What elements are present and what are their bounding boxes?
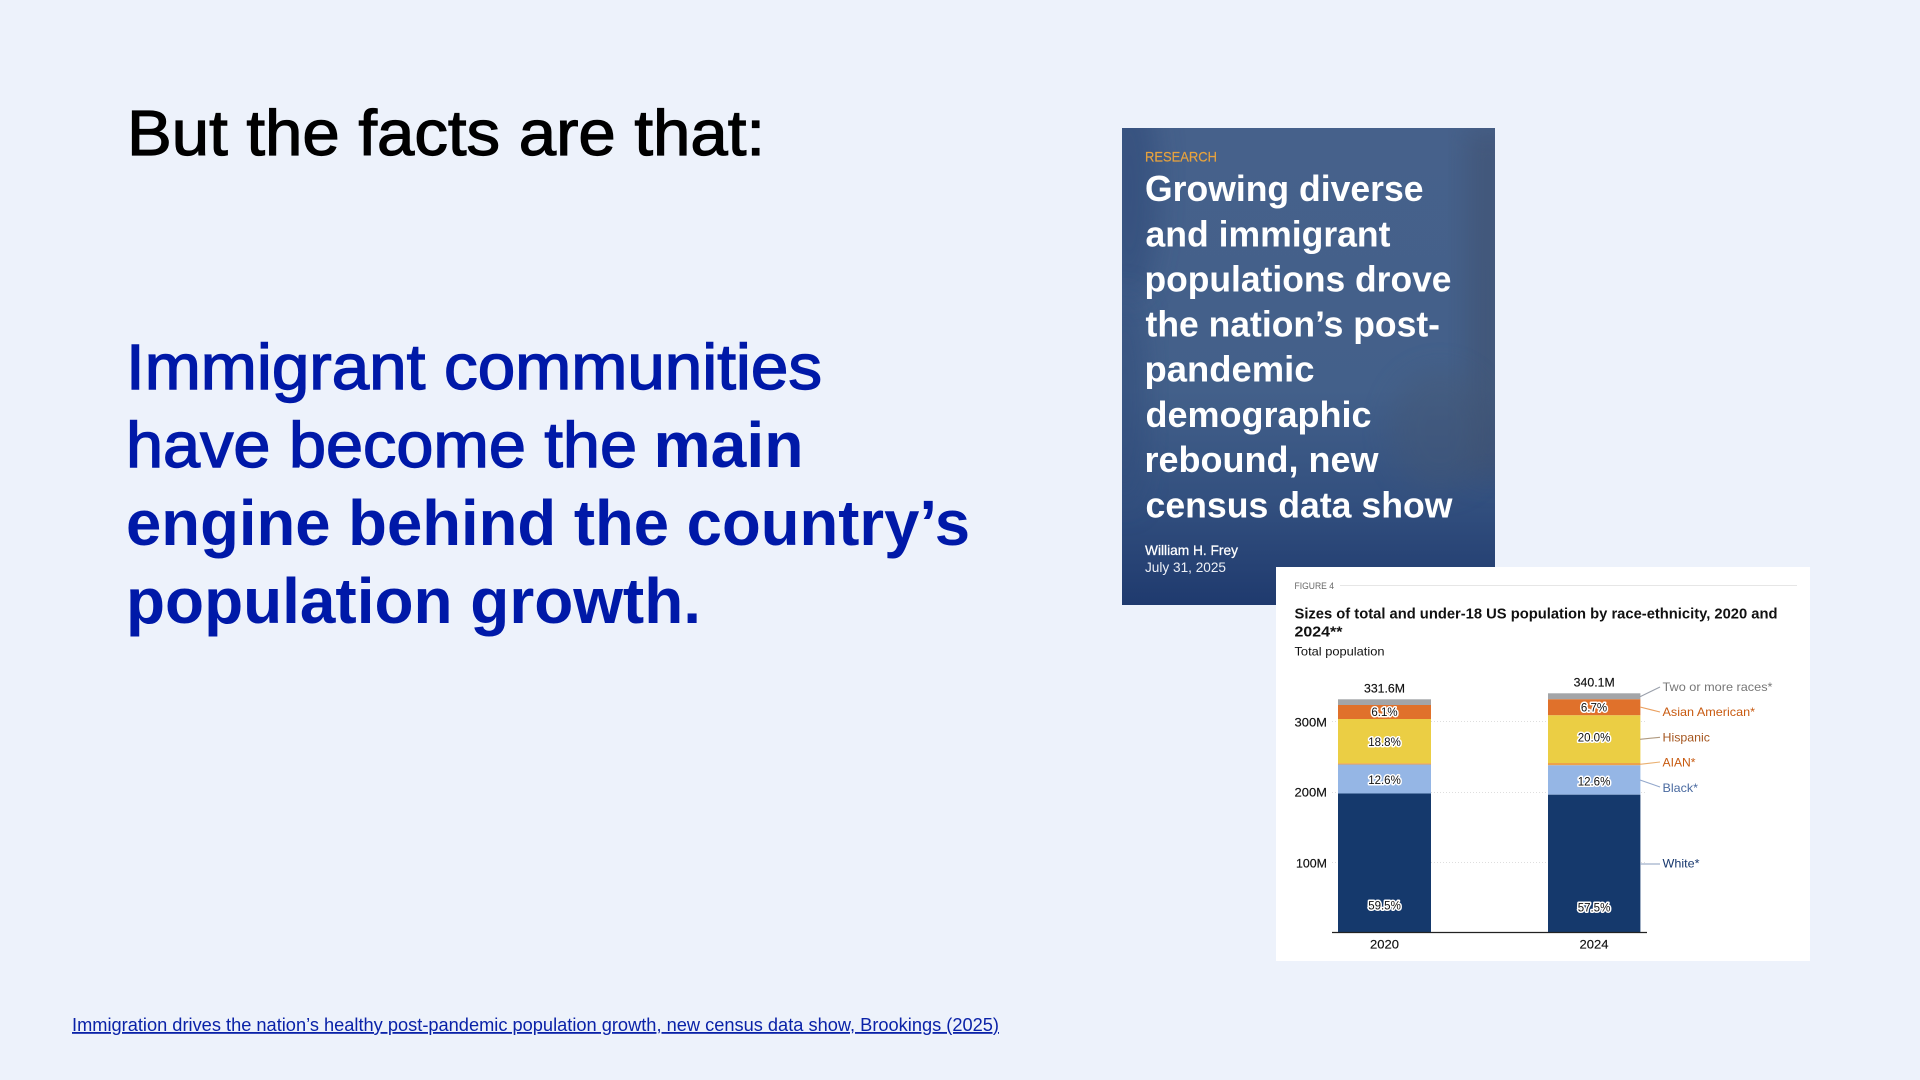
percent labels: 6.7% (1581, 702, 1607, 714)
percent labels: 6.1% (1371, 707, 1398, 719)
y axis labels: 100M (1296, 856, 1327, 870)
leader lines (1640, 687, 1660, 864)
percent labels: 12.6% (1368, 775, 1401, 787)
percent labels: 20.0% (1578, 732, 1610, 744)
article headline (1144, 168, 1453, 525)
y axis labels (1294, 716, 1327, 870)
statement: immigrant communities: engine behind the country’s (126, 487, 970, 559)
source link: Immigration drives the nation’s healthy post-pandemic population growth, new census data show, Brookings (2025) (72, 1015, 999, 1035)
bar totals: 331.6M (1364, 682, 1405, 696)
series legend labels: Hispanic (1662, 731, 1710, 745)
chart title (1294, 607, 1778, 641)
article headline: rebound, new (1144, 439, 1379, 480)
series legend labels: White* (1662, 856, 1700, 870)
figure label: FIGURE 4 (1294, 581, 1334, 592)
article headline: and immigrant (1146, 214, 1391, 255)
statement: immigrant communities (126, 331, 970, 637)
statement: immigrant communities: main (654, 409, 804, 481)
panel: figure 4 chart card (1276, 567, 1810, 961)
panel: research article card (1122, 128, 1495, 605)
article headline: Growing diverse (1145, 168, 1424, 209)
article headline: the nation’s post- (1146, 304, 1440, 345)
y axis labels: 200M (1294, 786, 1327, 800)
statement: immigrant communities: have become the (126, 409, 637, 481)
percent labels: 59.5% (1368, 900, 1401, 912)
series legend labels (1662, 680, 1773, 870)
percent labels (1368, 702, 1610, 914)
chart title: Sizes of total and under-18 US population by race-ethnicity, 2020 and (1294, 607, 1778, 623)
percent labels: 57.5% (1578, 902, 1610, 914)
x axis labels: 2024 (1580, 937, 1609, 951)
bar 2024 (1548, 693, 1640, 932)
article headline: populations drove (1144, 259, 1452, 300)
label: research: RESEARCH (1145, 149, 1217, 165)
series legend labels: AIAN* (1662, 756, 1696, 770)
article headline: pandemic (1144, 349, 1314, 390)
heading: But the facts are that: But the facts are that: (127, 97, 765, 169)
stacked bar chart (1294, 676, 1773, 951)
x axis labels: 2020 (1370, 937, 1399, 951)
chart title: 2024** (1294, 625, 1343, 641)
bar totals: 340.1M (1574, 676, 1615, 690)
article headline: census data show (1146, 484, 1453, 525)
series legend labels: Asian American* (1662, 705, 1755, 719)
statement: immigrant communities: Immigrant communities (126, 331, 822, 403)
y axis labels: 300M (1294, 716, 1327, 730)
bar 2020 (1338, 699, 1431, 932)
date: July 31, 2025 (1145, 559, 1226, 575)
percent labels: 18.8% (1368, 737, 1401, 749)
series legend labels: Black* (1662, 781, 1698, 795)
statement: immigrant communities: population growth. (126, 565, 701, 637)
bar totals (1364, 676, 1615, 696)
article headline: demographic (1146, 394, 1372, 435)
x axis line (1332, 932, 1647, 934)
chart subtitle: Total population (1294, 645, 1384, 659)
percent labels: 12.6% (1578, 776, 1610, 788)
byline: William H. Frey (1145, 542, 1238, 558)
x axis labels (1370, 937, 1609, 951)
series legend labels: Two or more races* (1662, 680, 1773, 694)
